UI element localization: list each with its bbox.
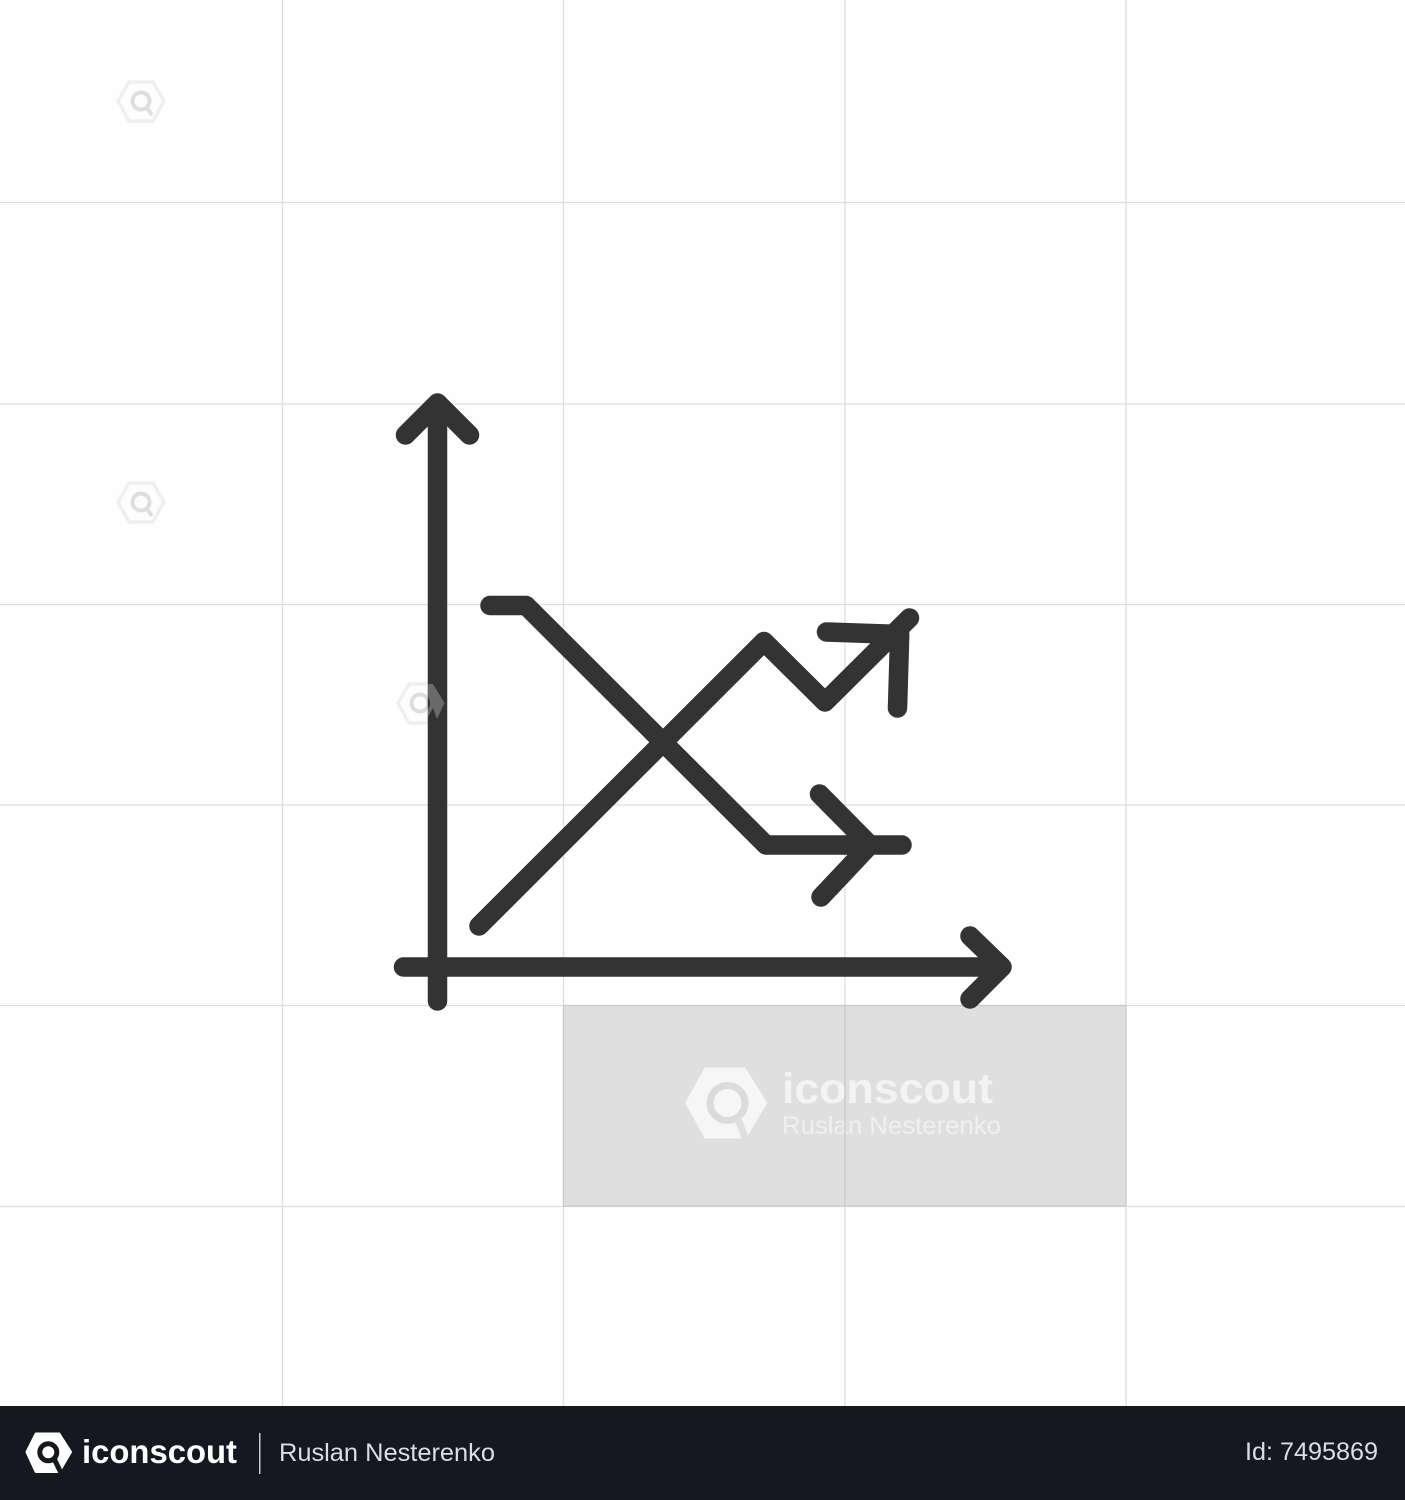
- footer author text: Ruslan Nesterenko: [279, 1439, 495, 1467]
- icon: watermark logo large: [688, 1070, 765, 1140]
- footer bar: [0, 1406, 1405, 1500]
- chart icon: [404, 403, 1002, 1001]
- x axis arrow: [404, 936, 1002, 999]
- icon: small watermark middle: [118, 483, 164, 522]
- falling trend line with arrow: [490, 606, 902, 897]
- icon: watermark over axis: [428, 684, 444, 719]
- rising trend line with arrow: [479, 618, 910, 926]
- footer id text: Id: 7495869: [1245, 1438, 1378, 1466]
- watermark brand text: iconscout: [782, 1065, 993, 1113]
- icon: small watermark top: [118, 82, 164, 121]
- icon: iconscout logo: [27, 1434, 70, 1474]
- footer brand text: iconscout: [82, 1433, 237, 1470]
- y axis arrow: [406, 403, 470, 1001]
- gray watermark panel: [563, 1005, 1126, 1206]
- icon: small watermark behind axis: [398, 684, 444, 723]
- footer divider: [259, 1433, 260, 1474]
- watermark author text: Ruslan Nesterenko: [782, 1112, 1001, 1140]
